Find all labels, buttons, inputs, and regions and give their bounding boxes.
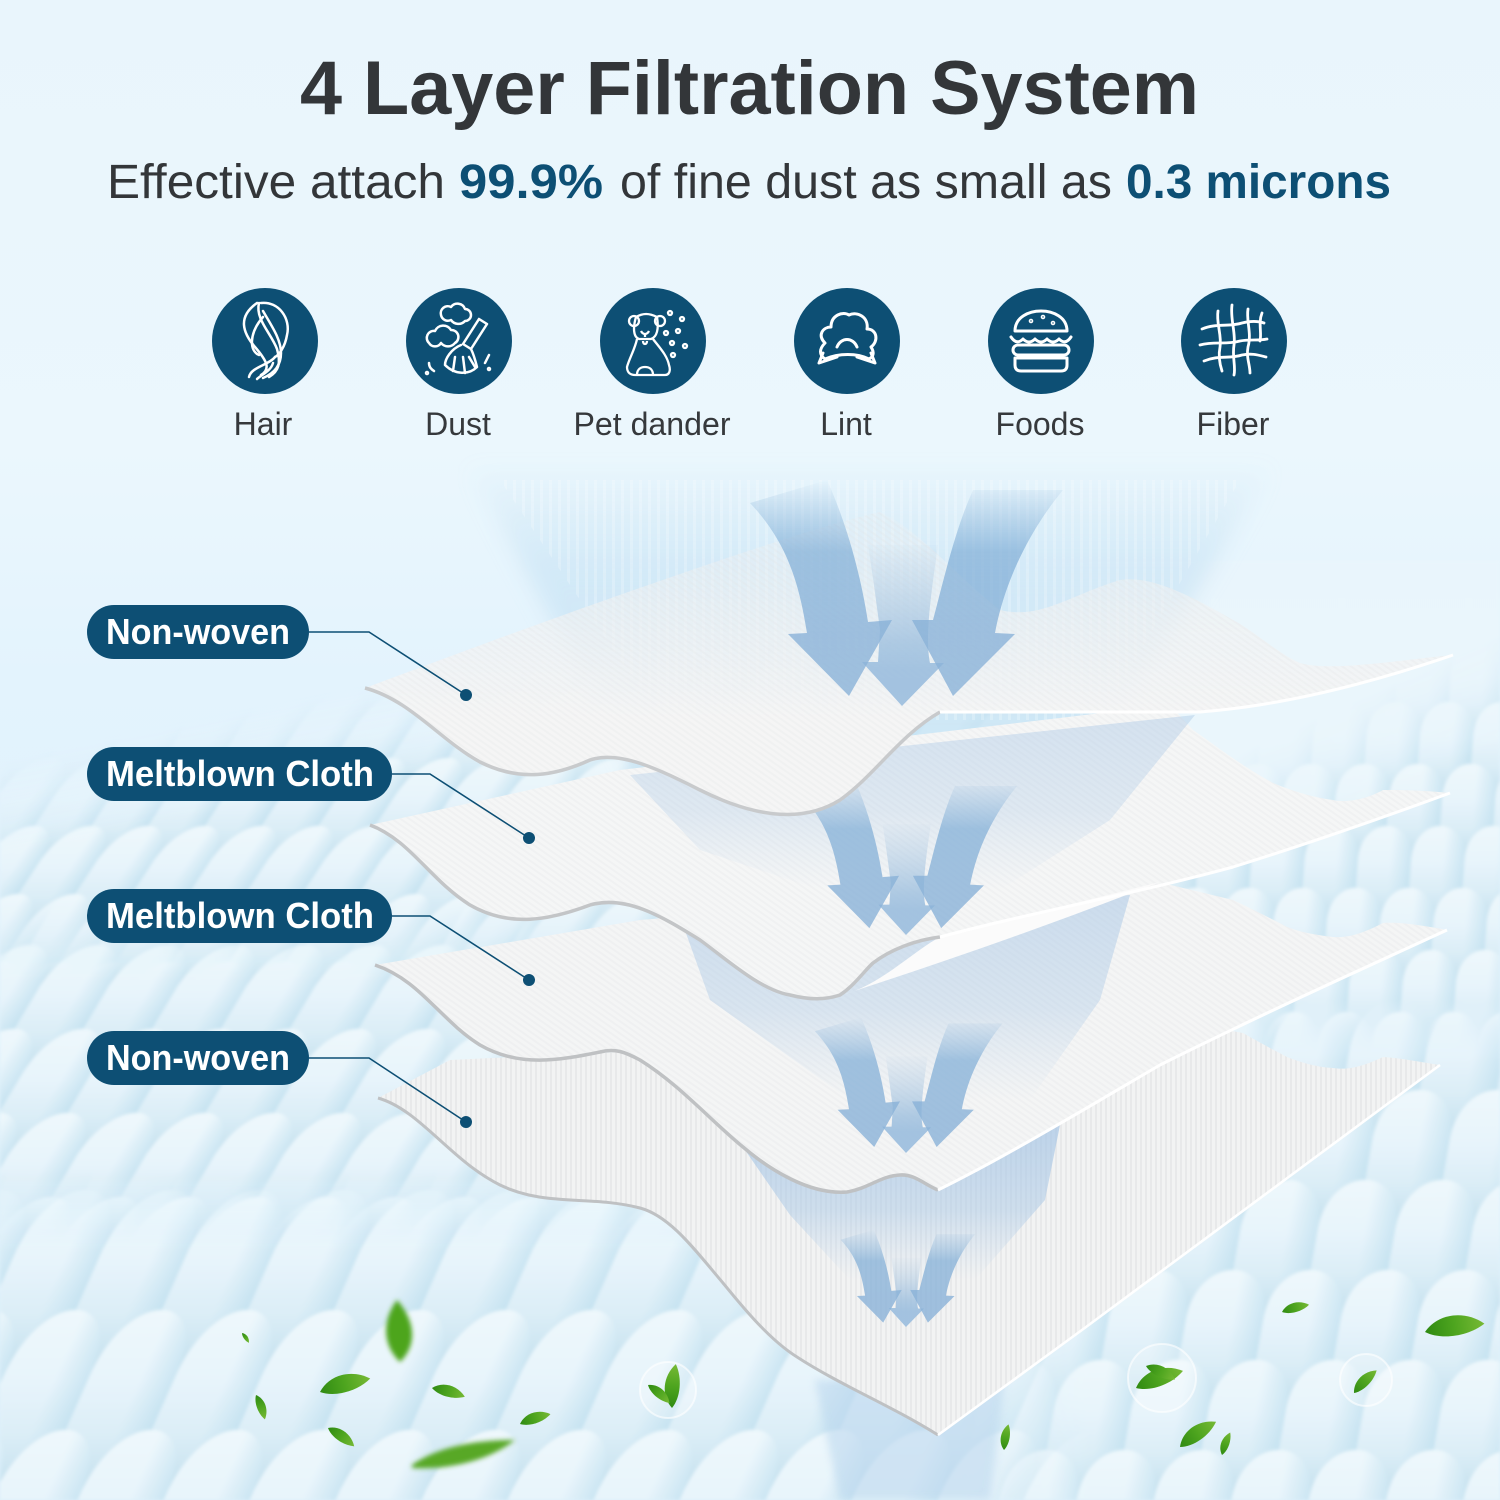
layer 2: meltblown sheet (370, 705, 1450, 999)
arrows: top airflow entering the filter (750, 480, 1063, 706)
icon labels: Foods (996, 406, 1084, 442)
subtitle: of fine dust as small as (620, 156, 1112, 209)
icon: lint (794, 288, 900, 394)
callout: non-woven top: Non-woven (106, 611, 290, 652)
layer 3: meltblown sheet (375, 880, 1447, 1192)
subtitle: Effective attach (107, 156, 445, 209)
leaves (241, 1299, 1486, 1468)
subtitle: 0.3 microns (1126, 156, 1391, 209)
icon: dust and broom (406, 288, 512, 394)
airflow beam through layer 2 (630, 715, 1195, 890)
icon: fiber (1181, 288, 1287, 394)
contaminant icons row (212, 288, 1287, 442)
icon labels: Dust (425, 406, 491, 442)
callout: meltblown cloth lower: Meltblown Cloth (106, 895, 374, 936)
icon labels (234, 406, 1270, 442)
arrows: layer 2 airflow (801, 779, 1017, 935)
callout: meltblown cloth upper: Meltblown Cloth (106, 753, 374, 794)
subtitle (107, 156, 1391, 209)
icon: pet dander (600, 288, 706, 394)
layer 4: non-woven sheet (378, 1025, 1440, 1435)
callout: meltblown cloth lower (87, 889, 535, 986)
arrows: layer 4 airflow (841, 1230, 975, 1327)
icon labels: Hair (234, 406, 293, 442)
callout: non-woven bottom (87, 1031, 472, 1128)
subtitle: 99.9% (459, 156, 603, 209)
icon: hair (212, 288, 318, 394)
icon labels: Pet dander (574, 406, 731, 442)
background: quilted filter texture (0, 696, 1500, 1500)
callout: non-woven top (87, 605, 472, 701)
airflow beam through layer 4 (745, 1125, 1060, 1280)
icon labels: Fiber (1197, 406, 1270, 442)
beam below the bottom layer (815, 1380, 1005, 1500)
icon labels: Lint (820, 406, 872, 442)
callout: non-woven bottom: Non-woven (106, 1037, 290, 1078)
icon: burger (988, 288, 1094, 394)
title: 4 Layer Filtration System (300, 46, 1199, 131)
callout: meltblown cloth upper (87, 747, 535, 844)
layer 1: non-woven sheet (365, 512, 1453, 814)
arrows: layer 3 airflow (815, 1017, 1003, 1153)
airflow beam through layer 3 (683, 895, 1130, 1100)
airflow fan behind the layers (470, 470, 1270, 900)
